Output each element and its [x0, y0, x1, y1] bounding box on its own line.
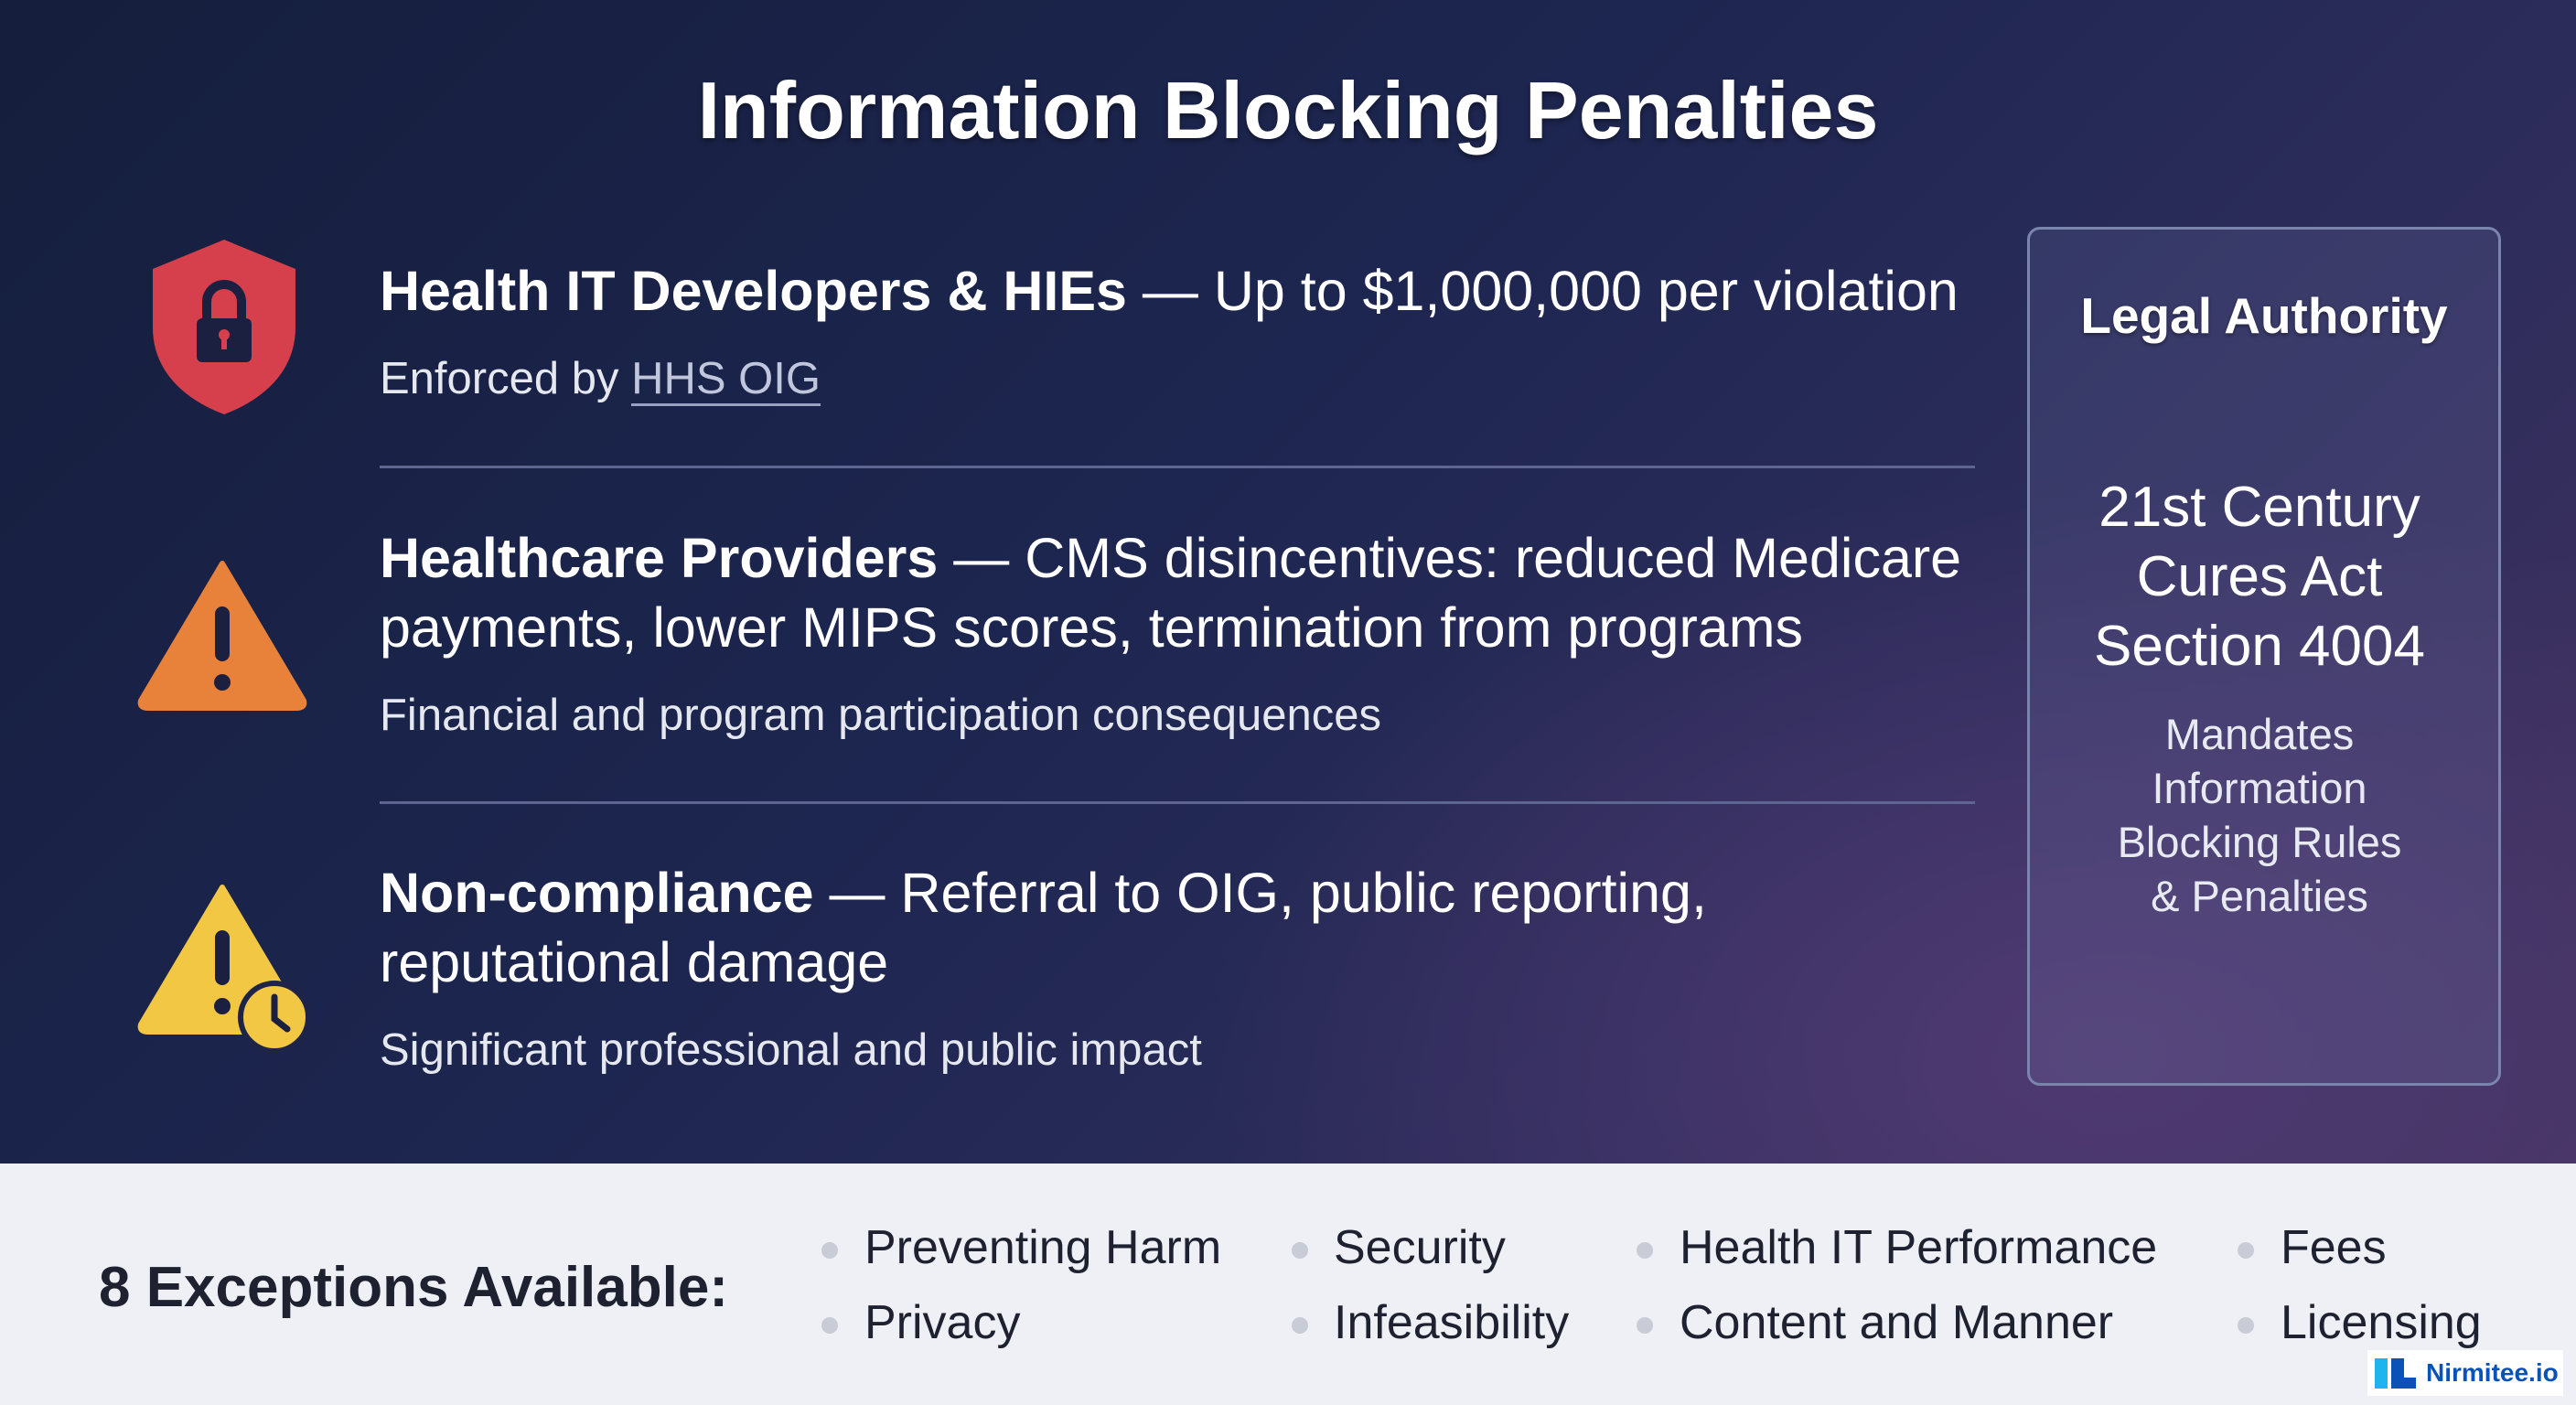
icon: shield lock	[153, 240, 295, 414]
row 2 text: Healthcare Providers — CMS disincentives: reduced Medicare	[380, 527, 1961, 589]
row 3 text: Non-compliance — Referral to OIG, public reporting,	[380, 862, 1707, 924]
heading: 8 Exceptions Available:	[99, 1256, 728, 1319]
row 2 text: payments, lower MIPS scores, termination from programs	[380, 596, 1803, 659]
icon: yellow warning clock	[137, 885, 306, 1048]
act name	[2094, 476, 2425, 678]
description: Blocking Rules	[2118, 818, 2401, 866]
description: Information	[2152, 764, 2367, 812]
list: Preventing Harm	[864, 1221, 1221, 1274]
logo	[2367, 1350, 2563, 1396]
row 1 text: Health IT Developers & HIEs — Up to $1,000,000 per violation	[380, 260, 1959, 322]
row 3 text: reputational damage	[380, 931, 888, 993]
list: Licensing	[2281, 1296, 2482, 1349]
list: Infeasibility	[1334, 1296, 1569, 1349]
icon: orange warning	[137, 561, 307, 711]
row 1 text: Enforced by HHS OIG	[380, 354, 821, 403]
heading: Legal Authority	[2080, 287, 2448, 344]
panel: legal authority	[2027, 227, 2501, 1086]
list	[821, 1221, 2482, 1349]
description	[2118, 710, 2401, 920]
description: & Penalties	[2151, 872, 2368, 920]
exceptions band	[99, 1221, 2563, 1396]
row 3 text: Significant professional and public impact	[380, 1025, 1202, 1075]
list: Content and Manner	[1680, 1296, 2113, 1349]
list: Fees	[2281, 1221, 2387, 1274]
logo: Nirmitee.io	[2426, 1358, 2559, 1387]
act name: Section 4004	[2094, 615, 2425, 678]
row 2 text: Financial and program participation consequences	[380, 691, 1381, 740]
description: Mandates	[2165, 710, 2354, 758]
row 3 text	[380, 862, 1707, 1075]
title: Information Blocking Penalties	[698, 65, 1878, 156]
act name: 21st Century	[2098, 476, 2420, 539]
list: Health IT Performance	[1680, 1221, 2157, 1274]
list: Security	[1334, 1221, 1506, 1274]
row 2 text	[380, 527, 1961, 740]
row 1 text	[380, 260, 1959, 406]
list: Privacy	[864, 1296, 1020, 1349]
act name: Cures Act	[2137, 545, 2382, 608]
